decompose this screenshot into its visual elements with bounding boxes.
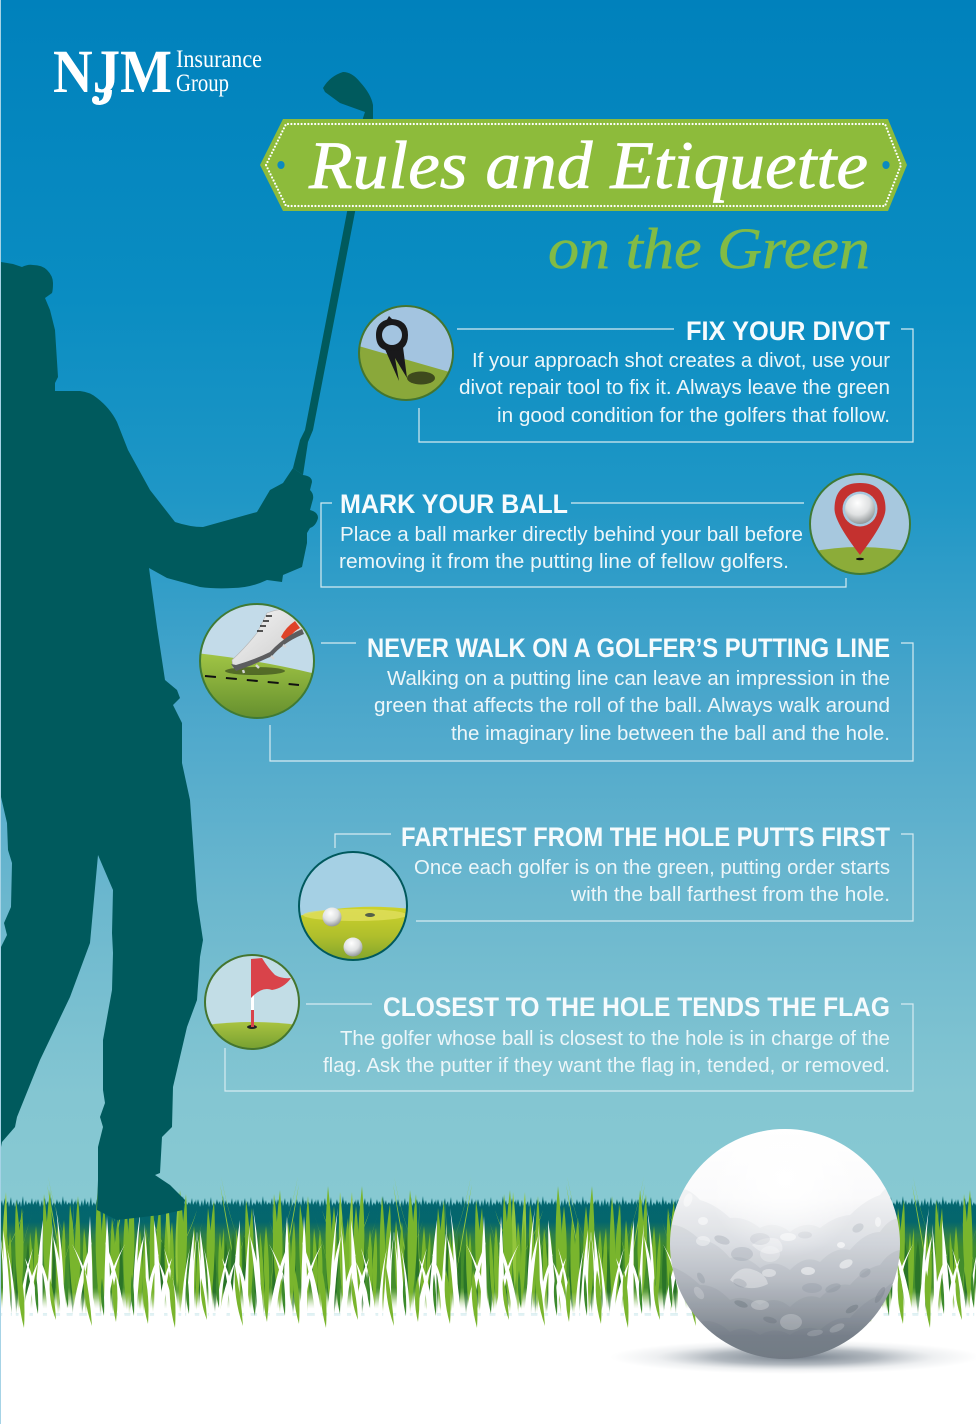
- logo: [53, 39, 262, 106]
- body text: the imaginary line between the ball and the hole.: [451, 723, 890, 745]
- body text: with the ball farthest from the hole.: [570, 884, 890, 906]
- golf club: [293, 72, 373, 475]
- body text: flag. Ask the putter if they want the flag in, tended, or removed.: [323, 1055, 890, 1077]
- panel: mark your ball: [321, 474, 915, 587]
- panel: closest to the hole tends the flag: [200, 955, 913, 1091]
- heading: FIX YOUR DIVOT: [686, 316, 890, 346]
- body text: [323, 1028, 890, 1077]
- icon: ball marker pin: [811, 475, 909, 573]
- body text: The golfer whose ball is closest to the hole is in charge of the: [340, 1028, 890, 1050]
- grass: [0, 1170, 976, 1424]
- body text: divot repair tool to fix it. Always leave the green: [459, 377, 890, 399]
- heading: NEVER WALK ON A GOLFER’S PUTTING LINE: [367, 633, 890, 663]
- subtitle: on the Green: [548, 216, 870, 281]
- icon: red flag: [206, 956, 298, 1048]
- title text: Rules and Etiquette: [308, 127, 868, 203]
- icon: divot tool: [360, 307, 452, 399]
- body text: green that affects the roll of the ball. Always walk around: [374, 695, 890, 717]
- golf ball shadow: [610, 1340, 976, 1374]
- golf ball: [665, 1129, 905, 1370]
- heading: FARTHEST FROM THE HOLE PUTTS FIRST: [401, 822, 890, 852]
- title banner: [260, 119, 907, 211]
- heading: CLOSEST TO THE HOLE TENDS THE FLAG: [383, 992, 890, 1022]
- panel: farthest from the hole putts first: [295, 822, 913, 965]
- body text: [374, 668, 890, 745]
- body text: removing it from the putting line of fellow golfers.: [339, 551, 789, 573]
- logo: Insurance: [176, 46, 262, 73]
- icon: two balls and hole: [300, 853, 406, 959]
- heading: MARK YOUR BALL: [340, 489, 568, 519]
- panel: never walk on a golfer's putting line: [195, 604, 913, 761]
- left edge strip: [0, 0, 1, 1424]
- body text: in good condition for the golfers that follow.: [497, 405, 890, 427]
- panel: fix your divot: [355, 306, 913, 442]
- body text: [339, 524, 803, 573]
- icon: golf shoe: [201, 605, 313, 717]
- body text: [414, 857, 890, 906]
- logo: Group: [176, 70, 229, 97]
- logo: NJM: [53, 39, 172, 106]
- body text: Place a ball marker directly behind your ball before: [340, 524, 803, 546]
- body text: Once each golfer is on the green, putting order starts: [414, 857, 890, 879]
- golfer silhouette: [1, 72, 373, 1220]
- body text: Walking on a putting line can leave an impression in the: [387, 668, 890, 690]
- body text: If your approach shot creates a divot, use your: [472, 350, 890, 372]
- body text: [459, 350, 890, 427]
